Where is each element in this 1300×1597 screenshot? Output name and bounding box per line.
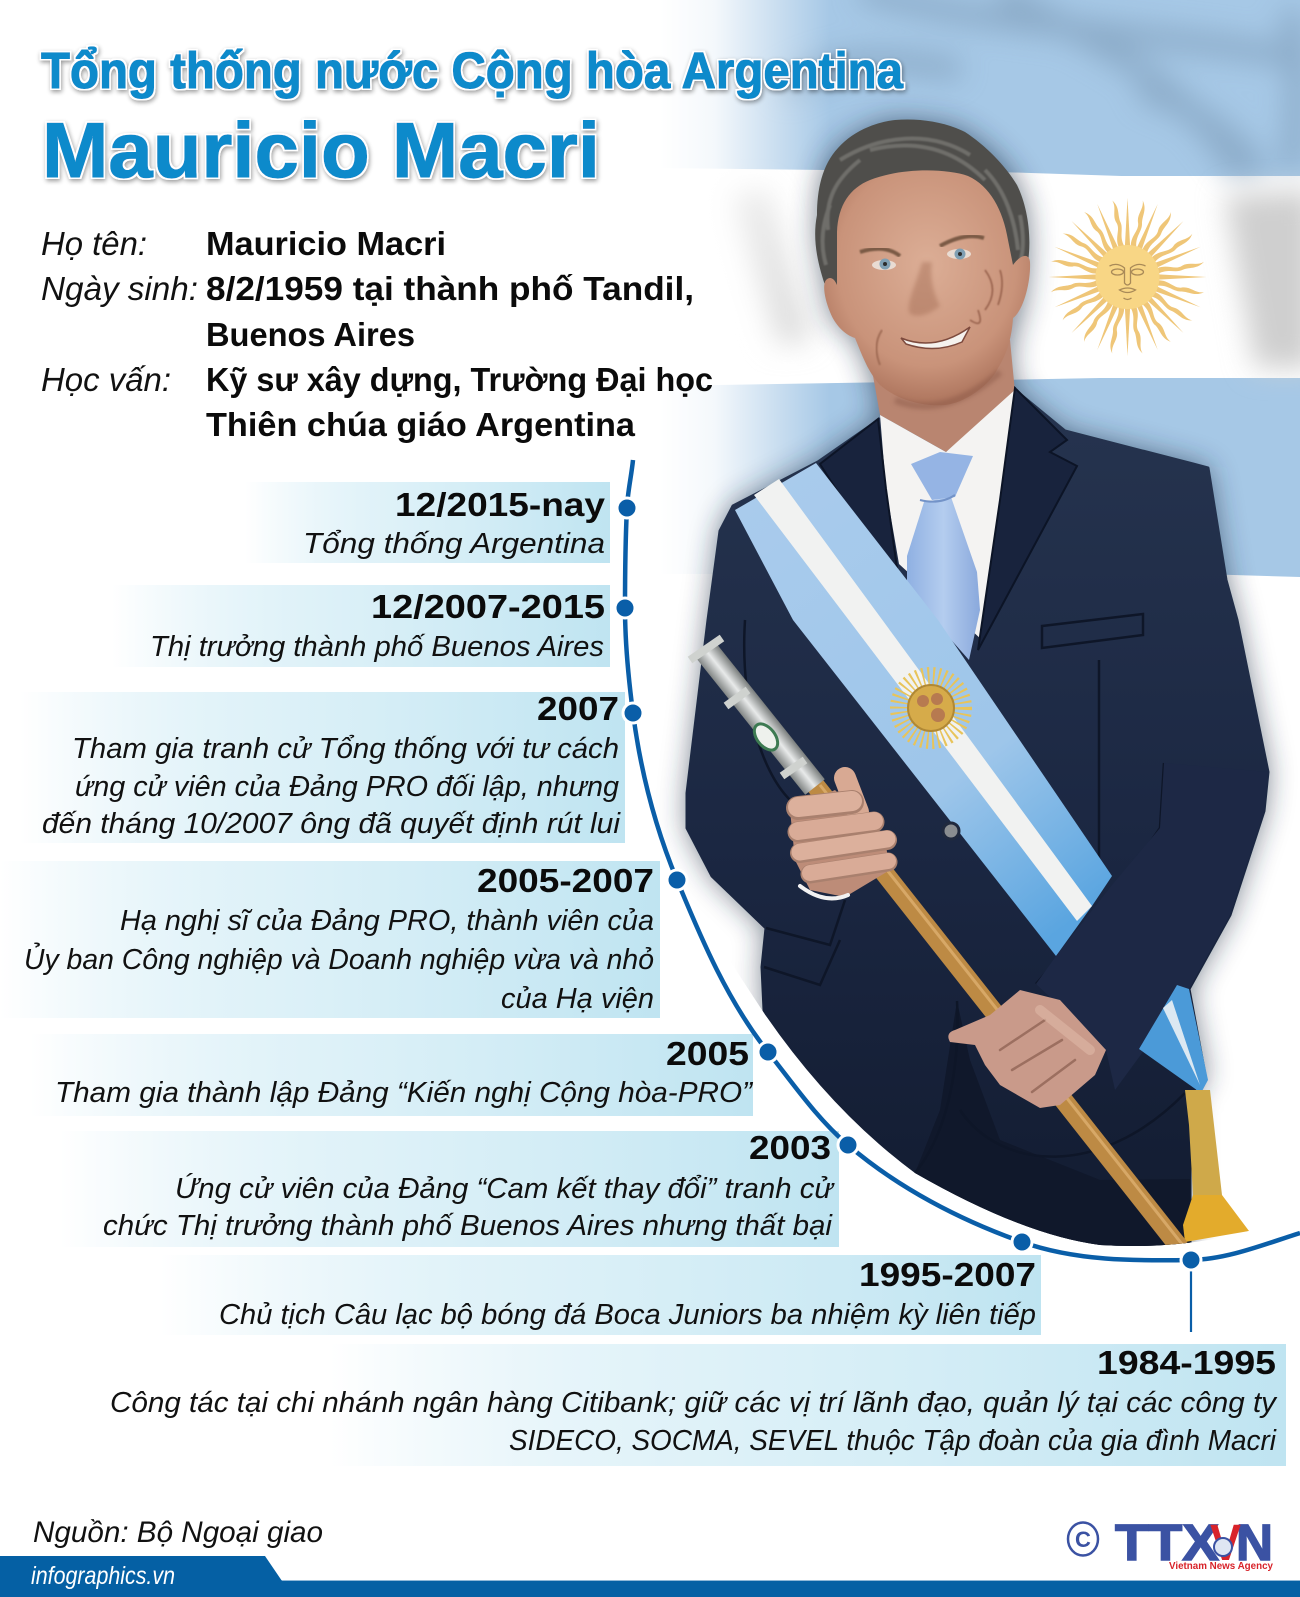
personal information: Kỹ sư xây dựng, Trường Đại học bbox=[206, 361, 713, 398]
timeline entry: 2007: đến tháng 10/2007 ông đã quyết định rút lui bbox=[42, 808, 622, 840]
personal information: Học vấn: bbox=[41, 361, 171, 398]
timeline entry: 2003: chức Thị trưởng thành phố Buenos Aires nhưng thất bại bbox=[103, 1210, 834, 1242]
timeline entry: 2005-2007: Hạ nghị sĩ của Đảng PRO, thành viên của bbox=[120, 905, 654, 937]
title line: Tổng thống nước Cộng hòa Argentina bbox=[41, 42, 904, 99]
timeline entry: 2005 bbox=[30, 1034, 753, 1116]
personal information: 8/2/1959 tại thành phố Tandil, bbox=[206, 270, 694, 307]
facial features bbox=[860, 236, 1002, 406]
ceremonial staff bbox=[690, 638, 1185, 1248]
sash sun bbox=[903, 680, 959, 736]
hair bbox=[815, 120, 1029, 288]
personal information: Thiên chúa giáo Argentina bbox=[206, 406, 636, 443]
right forearm bbox=[1036, 763, 1204, 1090]
TTXVN logo: Vietnam News Agency bbox=[1169, 1560, 1273, 1572]
personal information: Họ tên: bbox=[41, 225, 147, 262]
soft shadow behind figure bbox=[687, 120, 1268, 1300]
timeline entry: 12/2015-nay: Tổng thống Argentina bbox=[303, 528, 605, 560]
TTXVN logo: TTX bbox=[1115, 1514, 1219, 1571]
TTXVN logo: C bbox=[1075, 1527, 1091, 1552]
flag sun emblem bbox=[1048, 198, 1206, 356]
personal information: Ngày sinh: bbox=[41, 270, 198, 307]
timeline arc with dots bbox=[615, 460, 1300, 1332]
timeline entry: 1995-2007: 1995-2007 bbox=[859, 1256, 1036, 1293]
portrait of Mauricio Macri bbox=[687, 120, 1268, 1300]
timeline entry: 2007: Tham gia tranh cử Tổng thống với tư cách bbox=[72, 733, 619, 765]
TTXVN logo bbox=[1068, 1514, 1273, 1572]
grey folds on the white band bbox=[725, 190, 1300, 368]
timeline entry: 2003 bbox=[60, 1129, 839, 1247]
personal information: Buenos Aires bbox=[206, 316, 415, 353]
trousers and jacket front bbox=[915, 1009, 1190, 1246]
TTXVN logo: N bbox=[1236, 1514, 1273, 1571]
hair highlights bbox=[823, 139, 1023, 265]
timeline entry: 1984-1995: SIDECO, SOCMA, SEVEL thuộc Tập đoàn của gia đình Macri bbox=[509, 1425, 1277, 1457]
footer band bbox=[0, 1556, 1300, 1597]
Argentine flag background bbox=[660, 0, 1300, 600]
shirt bbox=[880, 388, 1017, 640]
timeline entry: 1984-1995: Công tác tại chi nhánh ngân hàng Citibank; giữ các vị trí lãnh đạo, quản lý tại các công ty bbox=[110, 1387, 1278, 1419]
presidential sash bbox=[735, 463, 1112, 956]
timeline entry: 2005-2007: 2005-2007 bbox=[477, 862, 654, 899]
jacket bbox=[687, 390, 1268, 1300]
TTXVN logo: V bbox=[1210, 1514, 1241, 1571]
footer band: infographics.vn bbox=[31, 1562, 175, 1590]
timeline entry: 2005: 2005 bbox=[666, 1035, 749, 1072]
timeline entry: 1984-1995: 1984-1995 bbox=[1097, 1344, 1276, 1381]
personal information bbox=[41, 225, 713, 443]
name heading: Mauricio Macri bbox=[42, 106, 600, 194]
timeline entry: 12/2007-2015: Thị trưởng thành phố Buenos Aires bbox=[150, 631, 604, 663]
sash end and tassel bbox=[1139, 985, 1249, 1242]
timeline entry: 1995-2007: Chủ tịch Câu lạc bộ bóng đá Boca Juniors ba nhiệm kỳ liên tiếp bbox=[219, 1299, 1036, 1331]
timeline entry: 2007 bbox=[20, 690, 625, 843]
timeline entry: 12/2015-nay: 12/2015-nay bbox=[395, 486, 606, 523]
tie bbox=[907, 452, 980, 660]
jacket seams and pockets bbox=[744, 614, 1185, 1173]
jacket button bbox=[943, 823, 959, 839]
timeline entry: 2003: 2003 bbox=[749, 1129, 831, 1166]
timeline entry: 2007: ứng cử viên của Đảng PRO đối lập, nhưng bbox=[75, 771, 619, 803]
timeline entry: 2005-2007: Ủy ban Công nghiệp và Doanh nghiệp vừa và nhỏ bbox=[24, 941, 654, 976]
timeline entry: 1995-2007 bbox=[160, 1255, 1041, 1335]
lower hand bbox=[948, 990, 1106, 1108]
flag fold shading bbox=[780, 0, 1300, 175]
timeline entry: 12/2007-2015: 12/2007-2015 bbox=[371, 588, 605, 625]
timeline entry: 2005-2007: của Hạ viện bbox=[501, 983, 654, 1015]
personal information: Mauricio Macri bbox=[206, 225, 446, 262]
timeline entry: 12/2007-2015 bbox=[112, 585, 610, 667]
timeline entry: 2005-2007 bbox=[0, 861, 660, 1018]
jacket lapels bbox=[820, 388, 1077, 650]
face bbox=[824, 170, 1030, 405]
upper hand bbox=[790, 778, 890, 898]
timeline entry: 2003: Ứng cử viên của Đảng “Cam kết thay đổi” tranh cử bbox=[175, 1172, 836, 1205]
timeline entry: 1984-1995 bbox=[110, 1344, 1286, 1466]
timeline entry: 12/2015-nay bbox=[245, 482, 610, 563]
timeline entry: 2005: Tham gia thành lập Đảng “Kiến nghị Cộng hòa-PRO” bbox=[55, 1077, 753, 1109]
neck bbox=[872, 340, 1015, 452]
source note: Nguồn: Bộ Ngoại giao bbox=[33, 1516, 323, 1549]
timeline entry: 2007: 2007 bbox=[537, 690, 619, 727]
